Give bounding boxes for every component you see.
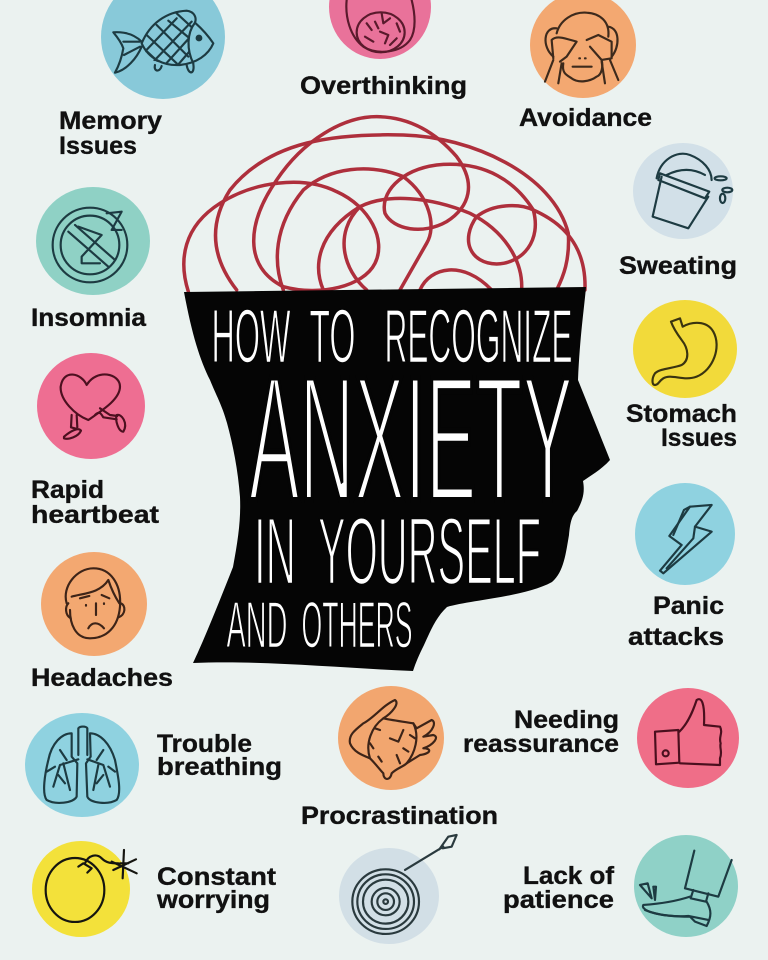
icon: thumbs up: [637, 688, 739, 788]
label: needing reassurance: Needing: [514, 706, 619, 734]
title line: and others: AND: [226, 588, 288, 662]
label: stomach issues: Stomach: [626, 400, 737, 428]
title line: how to recognize: TO: [310, 295, 356, 380]
title line: how to recognize: HOW: [212, 295, 291, 380]
label: memory issues: Issues: [59, 132, 137, 160]
icon: overthinking brain: [329, 0, 431, 59]
label: constant worrying: Constant: [157, 863, 277, 891]
label: procrastination: Procrastination: [301, 802, 498, 830]
label: panic attacks: attacks: [628, 623, 724, 651]
label: panic attacks: Panic: [653, 592, 724, 620]
title line: in yourself: IN: [254, 498, 296, 605]
label: memory issues: Memory: [59, 107, 162, 135]
icon: constant worrying bomb: [32, 841, 137, 937]
label: insomnia: Insomnia: [31, 304, 147, 332]
label: rapid heartbeat: heartbeat: [31, 501, 160, 529]
icon: procrastination melting clock hand: [338, 686, 444, 790]
head silhouette with title: OTHERS: [302, 588, 412, 662]
icon: insomnia: [36, 187, 150, 295]
icon: target with arrow: [339, 835, 457, 944]
label: lack of patience: Lack of: [523, 862, 615, 890]
head silhouette with title: [184, 287, 610, 671]
label: needing reassurance: reassurance: [463, 730, 619, 758]
brain scribble: [184, 117, 585, 292]
label: lack of patience: patience: [503, 886, 614, 914]
label: avoidance: Avoidance: [519, 104, 652, 132]
label: sweating: Sweating: [619, 252, 737, 280]
icon: memory issues fish: [101, 0, 225, 99]
label: constant worrying: worrying: [156, 886, 270, 914]
icon: trouble breathing lungs: [25, 713, 139, 817]
icon: panic lightning bolt: [635, 483, 735, 585]
label: overthinking: Overthinking: [300, 72, 467, 100]
icon: headaches face: [41, 552, 147, 656]
label: stomach issues: Issues: [661, 424, 737, 452]
label: trouble breathing: Trouble: [157, 730, 252, 758]
icon: stomach: [633, 300, 737, 398]
label: headaches: Headaches: [31, 664, 173, 692]
icon: avoidance covered eyes: [530, 0, 636, 98]
icon: sweating bucket: [633, 143, 733, 239]
label: rapid heartbeat: Rapid: [31, 476, 104, 504]
icon: rapid heartbeat: [37, 353, 145, 459]
icon: tapping foot: [634, 835, 738, 937]
label: trouble breathing: breathing: [157, 753, 282, 781]
